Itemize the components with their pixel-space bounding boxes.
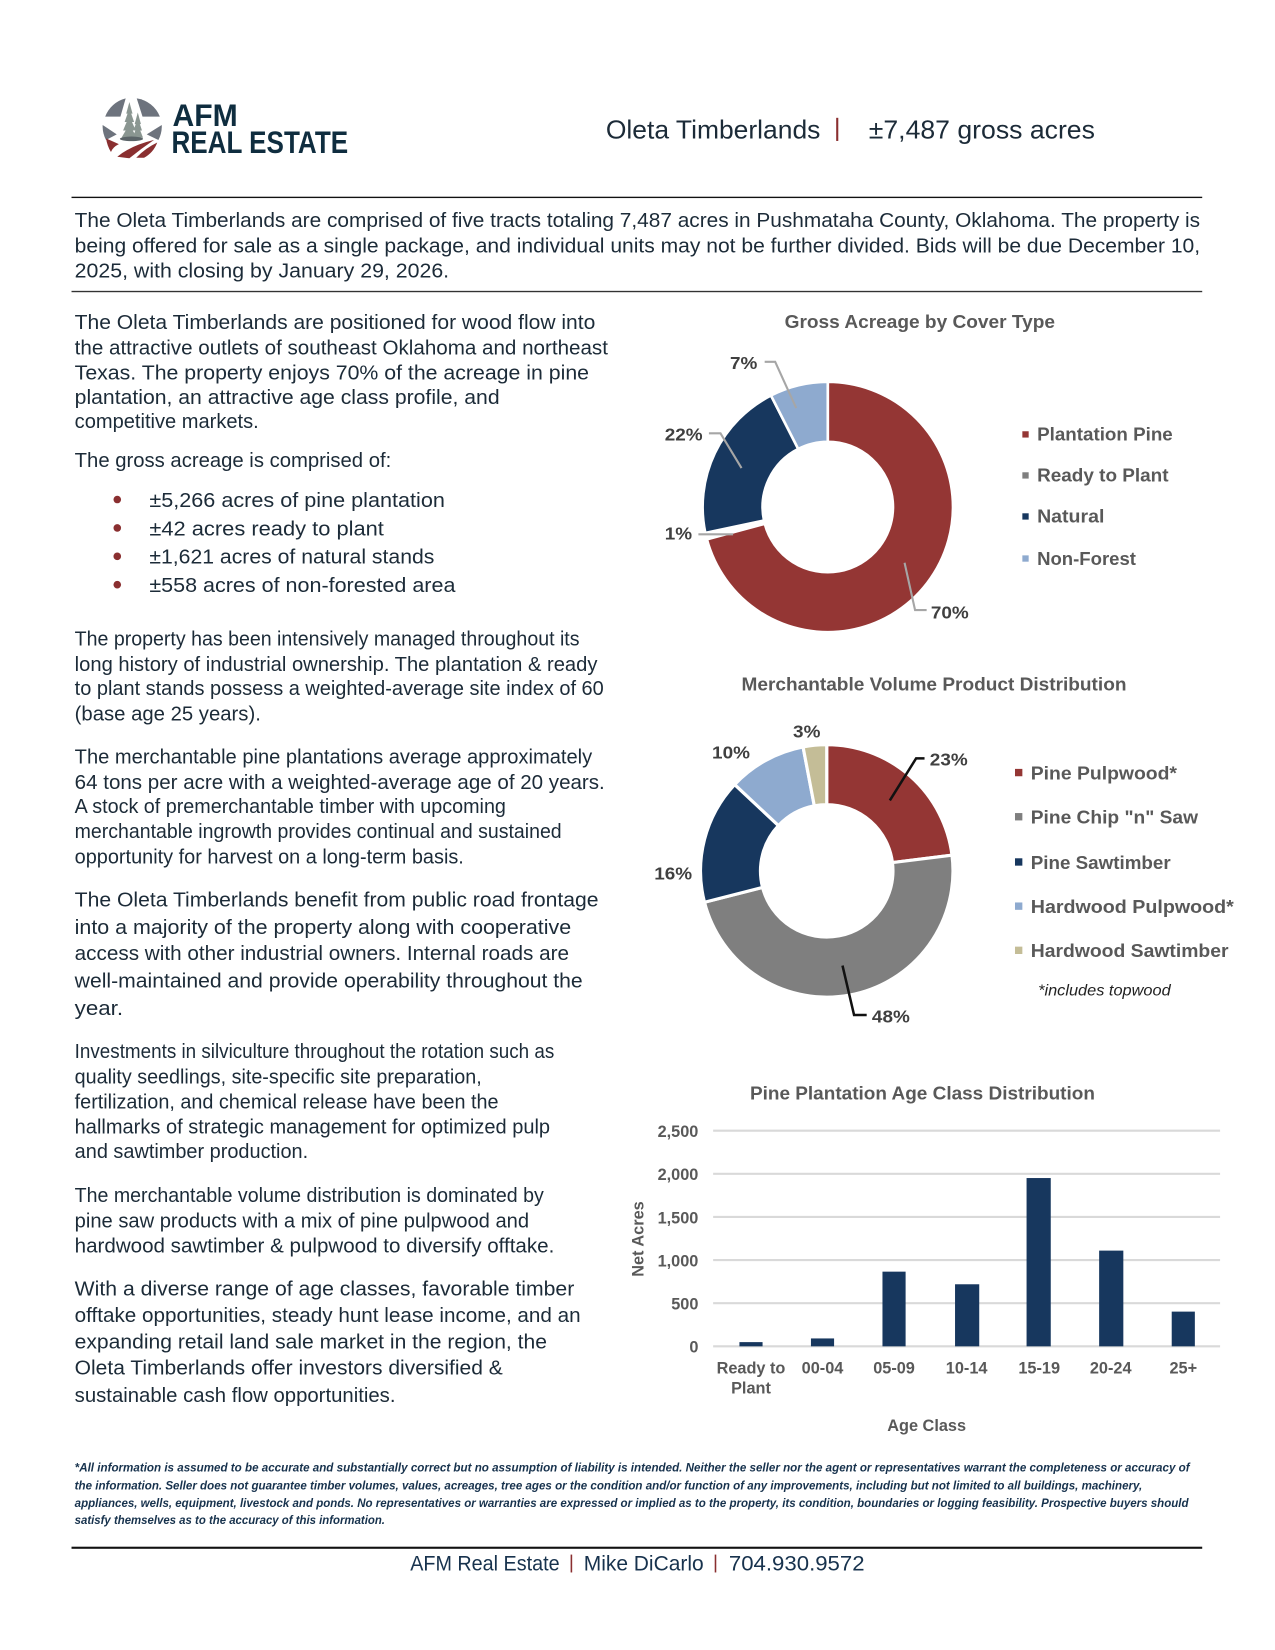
text block: volume distribution: pine saw products with a mix of pine pulpwood and [75,1210,529,1232]
x axis labels [717,1360,1197,1398]
legend: Plantation Pine [1037,424,1173,445]
bullet list: acreage: ±5,266 acres of pine plantation [149,490,445,512]
footer contact [410,1552,865,1575]
text block: road access: access with other industrial owners. Internal roads are [75,943,569,965]
legend [1015,762,1235,961]
footer contact: Mike DiCarlo [584,1552,704,1575]
logo wordmark: AFM [172,97,238,133]
bullet list: acreage [113,490,456,597]
text block: positioning: Texas. The property enjoys 70% of the acreage in pine [75,363,589,385]
disclaimer: *All information is assumed to be accurate and substantially correct but no assumption of liability is intended. Neither the seller nor the agent or representatives warrant the completeness or accuracy of [75,1460,1191,1474]
legend: Non-Forest [1037,548,1136,569]
intro text: The Oleta Timberlands are comprised of five tracts totaling 7,487 acres in Pushmataha County, Oklahoma. The property is [75,210,1200,232]
text block: gross acreage intro: The gross acreage is comprised of: [75,450,391,472]
footer contact: AFM Real Estate [410,1552,560,1575]
text block: silviculture [75,1041,554,1163]
text block: silviculture: and sawtimber production. [75,1141,308,1163]
legend: Pine Sawtimber [1031,852,1171,873]
y axis labels: 0 [689,1339,698,1357]
y axis labels: 500 [671,1296,698,1314]
text block: volume distribution [75,1185,554,1258]
text block: silviculture: quality seedlings, site-specific site preparation, [75,1066,482,1088]
text block: positioning [75,312,608,433]
bullet list: acreage: ±1,621 acres of natural stands [149,547,434,569]
x axis title: Age Class [887,1417,966,1435]
text block: road access: well-maintained and provide operability throughout the [74,971,583,993]
text block: conclusion: With a diverse range of age classes, favorable timber [75,1279,575,1301]
x axis labels: 20-24 [1090,1360,1132,1378]
chart title: Gross Acreage by Cover Type [785,311,1055,332]
legend: Ready to Plant [1037,465,1169,486]
text block: positioning: competitive markets. [75,411,259,433]
intro text: 2025, with closing by January 29, 2026. [75,261,449,283]
chart title: Pine Plantation Age Class Distribution [750,1083,1095,1104]
bullet list: acreage: ±42 acres ready to plant [149,518,384,540]
leader lines and percent labels: 16% [654,863,692,883]
legend: Pine Pulpwood* [1031,762,1178,783]
text block: merchantable plantations: A stock of premerchantable timber with upcoming [75,796,506,818]
x axis labels: Ready to [717,1360,785,1378]
text block: volume distribution: hardwood sawtimber & pulpwood to diversify offtake. [75,1236,554,1258]
leader lines and percent labels: 1% [665,524,692,544]
legend: Natural [1037,506,1104,527]
text block: conclusion: sustainable cash flow opportunities. [75,1385,395,1407]
text block: management history [75,629,604,725]
text block: conclusion: expanding retail land sale market in the region, the [75,1331,547,1353]
y axis labels: 2,500 [658,1123,698,1141]
text block: silviculture: Investments in silviculture throughout the rotation such as [75,1041,554,1063]
icon: star and tree emblem [103,98,162,158]
footnote: topwood: *includes topwood [1038,983,1172,1000]
panel: merchantable volume donut chart [654,674,1235,1026]
text block: management history: (base age 25 years). [75,703,261,725]
intro text: being offered for sale as a single package, and individual units may not be further divided. Bids will be due December 10, [75,235,1200,257]
leader lines and percent labels: 23% [930,750,968,770]
text block: conclusion [75,1279,581,1407]
text block: silviculture: hallmarks of strategic management for optimized pulp [75,1117,550,1139]
leader lines and percent labels [665,353,969,622]
x axis labels: 00-04 [802,1360,843,1378]
leader lines and percent labels: 3% [793,721,820,741]
text block: merchantable plantations: The merchantable pine plantations average approximately [75,747,592,769]
bullet list: acreage: ±558 acres of non-forested area [149,575,456,597]
panel: gross acreage donut chart [665,311,1173,632]
y axis labels: 2,000 [658,1166,698,1184]
header title: ±7,487 gross acres [869,114,1095,144]
header title [606,114,1095,144]
text block: road access: The Oleta Timberlands benefit from public road frontage [75,890,598,912]
panel: age class bar chart [630,1083,1220,1435]
text block: management history: to plant stands possess a weighted-average site index of 60 [75,678,604,700]
text block: conclusion: Oleta Timberlands offer investors diversified & [75,1358,503,1380]
bars [739,1178,1195,1346]
text block: conclusion: offtake opportunities, steady hunt lease income, and an [75,1305,581,1327]
header title: Oleta Timberlands [606,114,820,144]
x axis labels: 10-14 [946,1360,987,1378]
logo wordmark: REAL ESTATE [171,124,348,160]
text block: volume distribution: The merchantable volume distribution is dominated by [75,1185,544,1207]
text block: merchantable plantations: 64 tons per acre with a weighted-average age of 20 years. [75,772,605,794]
legend: Pine Chip "n" Saw [1031,807,1199,828]
text block: management history: The property has been intensively managed throughout its [75,629,580,651]
text block: road access: into a majority of the property along with cooperative [75,917,571,939]
legend [1022,424,1173,569]
y axis labels: 1,000 [658,1252,698,1270]
text block: merchantable plantations: merchantable ingrowth provides continual and sustained [75,821,562,843]
text block: management history: long history of industrial ownership. The plantation & ready [75,654,597,676]
disclaimer: appliances, wells, equipment, livestock and ponds. No representatives or warranties are expressed or implied as to the property, its condition, boundaries or logging feasibility. Prospective buyers should [75,1496,1189,1510]
text block: positioning: the attractive outlets of southeast Oklahoma and northeast [75,337,608,359]
disclaimer [75,1460,1191,1527]
disclaimer: satisfy themselves as to the accuracy of this information. [75,1513,385,1527]
text block: silviculture: fertilization, and chemical release have been the [75,1092,499,1114]
disclaimer: the information. Seller does not guarantee timber volumes, values, acreages, tree ages or the condition and/or function of any improvements, including but not limited to all buildings, machinery, [75,1478,1142,1492]
leader lines and percent labels: 7% [730,353,757,373]
text block: road access [74,890,598,1020]
text block: merchantable plantations: opportunity for harvest on a long-term basis. [75,846,464,868]
text block: road access: year. [75,998,123,1020]
x axis labels: 05-09 [873,1360,915,1378]
leader lines and percent labels: 70% [931,602,969,622]
donut [703,382,953,632]
x axis labels: 15-19 [1018,1360,1060,1378]
y axis labels: 1,500 [658,1209,698,1227]
leader lines and percent labels: 10% [712,742,750,762]
logo wordmark [171,97,348,160]
legend: Hardwood Sawtimber [1031,940,1229,961]
leader lines and percent labels: 48% [872,1006,910,1026]
text block: merchantable plantations [75,747,605,868]
text block: positioning: The Oleta Timberlands are positioned for wood flow into [75,312,595,334]
intro text [75,210,1200,283]
leader lines and percent labels: 22% [665,425,703,445]
y axis labels [658,1123,698,1357]
logo [103,97,348,160]
gridlines [713,1131,1220,1346]
footer contact: 704.930.9572 [729,1552,865,1575]
leader lines and percent labels [654,721,968,1026]
x axis labels: 25+ [1169,1360,1197,1378]
chart title: Merchantable Volume Product Distribution [742,674,1126,695]
y axis title: Net Acres [630,1201,648,1277]
text block: positioning: plantation, an attractive age class profile, and [75,387,500,409]
x axis labels: Plant [731,1380,771,1398]
legend: Hardwood Pulpwood* [1031,896,1235,917]
donut [701,745,953,997]
